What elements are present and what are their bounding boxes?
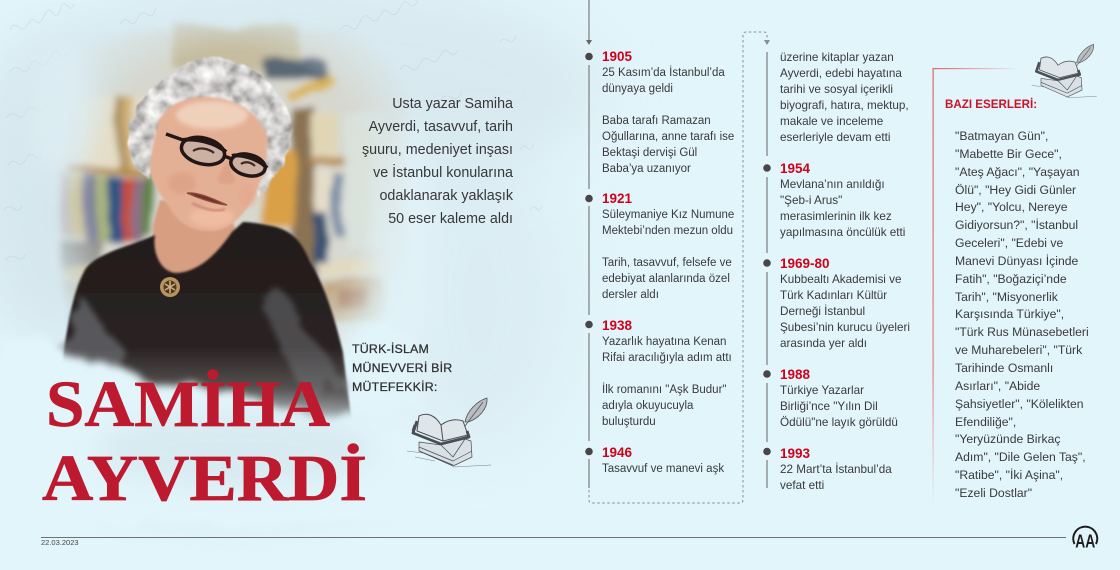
timeline 1921 — [602, 191, 734, 301]
works list: Adım", "Dile Gelen Taş", — [955, 450, 1086, 464]
timeline 1969-80: Şubesi’nin kurucu üyeleri — [780, 321, 910, 334]
background and portrait artwork — [0, 0, 572, 478]
works heading: BAZI ESERLERİ: — [945, 98, 1037, 111]
intro text — [362, 96, 513, 227]
timeline continuation: üzerine kitaplar yazan — [780, 51, 894, 64]
works list: Geceleri", "Edebi ve — [955, 236, 1063, 250]
timeline 1905: Bektaşi dervişi Gül — [602, 147, 697, 159]
timeline continuation: Ayverdi, edebi hayatına — [780, 67, 902, 80]
timeline 1993: 1993 — [780, 446, 810, 461]
timeline 1938: adıyla okuyucuyla — [602, 400, 693, 412]
timeline 1988 — [780, 367, 898, 429]
timeline 1988: Ödülü"ne layık görüldü — [780, 416, 898, 429]
works panel frame — [932, 68, 1016, 496]
subtitle: MÜNEVVERİ BİR — [352, 361, 452, 375]
timeline 1905: Oğullarına, anne tarafı ise — [602, 131, 734, 143]
timeline 1938: buluşturdu — [602, 416, 656, 428]
title — [42, 368, 367, 515]
subtitle — [352, 342, 452, 394]
timeline 1988: Türkiye Yazarlar — [780, 384, 864, 397]
works list: Ölü", "Hey Gidi Günler — [955, 183, 1076, 197]
works list: "Ateş Ağacı", "Yaşayan — [955, 165, 1080, 179]
logo: AA — [1072, 526, 1098, 552]
timeline 1993: 22 Mart’ta İstanbul’da — [780, 463, 892, 476]
timeline 1946 — [602, 445, 724, 475]
timeline 1969-80 — [780, 256, 910, 350]
footer line — [41, 537, 1066, 538]
timeline continuation: eserleriyle devam etti — [780, 131, 890, 144]
timeline 1921: Mektebi’nden mezun oldu — [602, 225, 733, 237]
icon: book and quill — [407, 398, 491, 468]
timeline 1921: Süleymaniye Kız Numune — [602, 209, 734, 221]
works list: "Yeryüzünde Birkaç — [955, 432, 1060, 446]
works list: "Mabette Bir Gece", — [955, 147, 1062, 161]
timeline 1938: Rifai aracılığıyla adım attı — [602, 352, 732, 364]
timeline continuation — [780, 51, 909, 144]
works list: Manevi Dünyası İçinde — [955, 254, 1078, 268]
timeline 1946: 1946 — [602, 445, 632, 460]
timeline continuation: tarihi ve sosyal içerikli — [780, 83, 893, 96]
hair — [128, 58, 292, 197]
intro text: Ayverdi, tasavvuf, tarih — [369, 119, 513, 135]
works list — [955, 129, 1089, 500]
works list: Şahsiyetler", "Kölelikten — [955, 397, 1084, 411]
works list: Karşısında Türkiye", — [955, 307, 1064, 321]
timeline 1905 — [602, 49, 734, 175]
timeline 1969-80: arasında yer aldı — [780, 337, 867, 350]
blurred bookshelf — [60, 26, 407, 377]
works list: "Türk Rus Münasebetleri — [955, 325, 1089, 339]
timeline 1988: 1988 — [780, 367, 810, 382]
timeline 1921: edebiyat alanlarında özel — [602, 273, 730, 285]
timeline 1938: 1938 — [602, 318, 632, 333]
timeline 1905: Baba tarafı Ramazan — [602, 115, 711, 127]
title: AYVERDİ — [42, 442, 367, 515]
intro text: şuuru, medeniyet inşası — [362, 142, 513, 158]
timeline 1938: İlk romanını "Aşk Budur" — [602, 384, 726, 396]
timeline 1969-80: 1969-80 — [780, 256, 830, 271]
dress watercolor patches — [60, 292, 345, 395]
portrait — [58, 58, 352, 425]
works list: "Batmayan Gün", — [955, 129, 1048, 143]
works list: Asırları", "Abide — [955, 379, 1040, 393]
timeline 1938: Yazarlık hayatına Kenan — [602, 336, 726, 348]
works list: Fatih", "Boğaziçi’nde — [955, 272, 1067, 286]
timeline 1993: vefat etti — [780, 479, 824, 492]
timeline 1954: merasimlerinin ilk kez — [780, 210, 892, 223]
works list: Efendiliğe", — [955, 414, 1016, 428]
works list: "Ratibe", "İki Aşina", — [955, 468, 1063, 482]
watercolor fade under portrait — [0, 318, 430, 525]
glasses — [166, 133, 268, 179]
timeline 1921: 1921 — [602, 191, 632, 206]
brooch — [160, 277, 180, 297]
timeline 1905: 1905 — [602, 49, 632, 64]
timeline 1954: yapılmasına öncülük etti — [780, 226, 905, 239]
works list: Gidiyorsun?", "İstanbul — [955, 218, 1078, 232]
timeline 1954 — [780, 161, 905, 239]
intro text: 50 eser kaleme aldı — [388, 211, 513, 227]
title: SAMİHA — [46, 368, 330, 441]
icon: book and quill small — [1032, 44, 1097, 98]
intro text: Usta yazar Samiha — [392, 96, 513, 112]
timeline 1988: Birliği’nce "Yılın Dil — [780, 400, 878, 413]
works list: Tarihinde Osmanlı — [955, 361, 1053, 375]
works list: Hey", "Yolcu, Nereye — [955, 200, 1068, 214]
subtitle: MÜTEFEKKİR: — [352, 380, 438, 394]
timeline 1954: 1954 — [780, 161, 810, 176]
timeline 1938 — [602, 318, 732, 428]
timeline 1969-80: Derneği İstanbul — [780, 305, 865, 318]
date: 22.03.2023 — [41, 538, 79, 547]
timeline 1954: Mevlana’nın anıldığı — [780, 178, 885, 191]
timeline 1993 — [780, 446, 892, 492]
timeline continuation: biyografi, hatıra, mektup, — [780, 99, 909, 112]
timeline 1905: 25 Kasım’da İstanbul’da — [602, 67, 725, 79]
timeline continuation: makale ve inceleme — [780, 115, 883, 128]
works list: "Ezeli Dostlar" — [955, 486, 1032, 500]
face — [150, 97, 267, 231]
subtitle: TÜRK-İSLAM — [352, 342, 429, 356]
timeline 1954: "Şeb-i Arus" — [780, 194, 842, 207]
timeline lines and dots — [585, 0, 771, 504]
works list: Tarih", "Misyonerlik — [955, 290, 1058, 304]
timeline 1905: dünyaya geldi — [602, 83, 673, 95]
intro text: ve İstanbul konularına — [373, 165, 513, 181]
timeline 1969-80: Kubbealtı Akademisi ve — [780, 273, 902, 286]
timeline 1905: Baba’ya uzanıyor — [602, 163, 691, 175]
timeline 1969-80: Türk Kadınları Kültür — [780, 289, 887, 302]
timeline 1946: Tasavvuf ve manevi aşk — [602, 463, 724, 475]
intro text: odaklanarak yaklaşık — [379, 188, 513, 204]
works list: ve Muharebeleri", "Türk — [955, 343, 1082, 357]
timeline 1921: dersler aldı — [602, 289, 659, 301]
timeline 1921: Tarih, tasavvuf, felsefe ve — [602, 257, 732, 269]
